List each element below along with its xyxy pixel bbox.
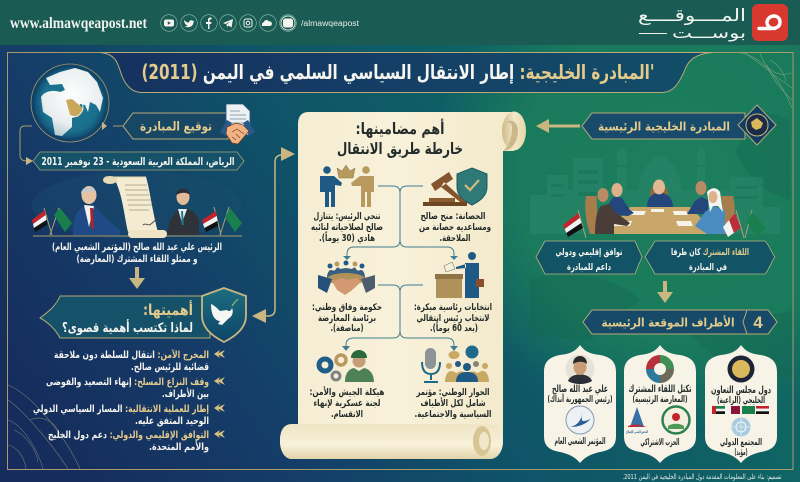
text: stepping down: هادي (30 يوماً). [319,231,375,244]
icon: unity government [318,260,375,295]
scroll heading: أهم مضامينها: [356,119,444,138]
signatories caption: و ممثلو اللقاء المشترك (المعارضة) [76,254,198,265]
map shapes in background [530,110,793,380]
text: national dialogue: شامل لكل الأطياف [420,397,486,409]
text: national dialogue: الحوار الوطني: مؤتمر [416,387,490,398]
corner ornament bottom left [8,385,80,469]
list item one: قضائية للرئيس صالح. [131,362,209,373]
card: Joint Meeting Parties: التجمع اليمني للإصلاح [626,429,648,435]
card: GCC states [705,345,777,463]
callout: regional and international consensus: داعم للمبادرة [567,262,611,273]
text: national dialogue: السياسية والاجتماعية. [414,409,492,420]
social media icons [161,15,296,31]
icon: dove shield [202,288,246,342]
saudi flag right [225,208,242,232]
scroll heading: خارطة طريق الانتقال [337,140,463,158]
flags by the table [563,210,766,238]
brand logo: المــــوقــــع [638,6,746,26]
text: military restructuring: الانقسام. [331,409,363,420]
list item three: الوحيد المتفق عليه. [135,416,209,427]
text: national unity government: برئاسة المعارضة [318,313,376,324]
icon: shield and gavel [423,168,487,206]
card: Ali Abdullah Saleh: (رئيس الجمهورية آنذاك) [548,393,612,405]
icon: GCC emblem [738,105,776,145]
signing illustration [32,171,242,239]
text: early elections: (بعد 60 يوماً). [430,321,478,334]
treaty scroll [103,176,167,238]
icon: gears and soldier [319,350,374,382]
list item one: المخرج الآمن: انتقال للسلطة دون ملاحقة [54,349,209,361]
callout: JMP was a party [645,241,775,274]
central figure [647,180,673,207]
title banner [100,52,712,92]
text: military restructuring: هيكلة الجيش والأمن: [310,386,384,398]
yemen flag left [32,210,47,232]
saudi flag left [54,208,72,232]
icon: microphone and people talking [422,346,489,382]
list item one [54,349,225,373]
card: Ali Abdullah Saleh: المؤتمر الشعبي العام [554,437,606,447]
text: military restructuring [310,386,384,420]
left signatory [73,186,120,235]
signatories caption: الرئيس علي عبد الله صالح (المؤتمر الشعبي العام) [52,242,222,253]
card: Ali Abdullah Saleh: علي عبد الله صالح [552,384,608,395]
banner: signing parties: الأطراف الموقعة الرئيسية [602,314,734,330]
text: national unity government [312,302,382,334]
list item three [33,404,225,427]
card: GCC states: (مؤيد) [734,448,748,458]
banner: main initiative [582,113,745,139]
text: national unity government: (مناصفة). [330,323,364,334]
arrow down to signing parties [657,281,673,303]
list item three: إطار للعملية الانتقالية: المسار السياسي الدولي [33,404,209,415]
arrow to roadmap scroll [536,119,580,133]
banner: signing parties [583,310,777,334]
website address: www.almawqeapost.net [10,15,148,32]
title banner: 'المبادرة الخليجية: إطار الانتقال السياسي السلمي في اليمن (2011) [142,60,654,85]
card: Joint Meeting Parties [624,345,696,463]
card: Joint Meeting Parties: الحزب الاشتراكي [640,438,680,448]
right side green glow [410,45,800,482]
card: GCC states: المجتمع الدولي [720,438,762,448]
banner: main initiative: المبادرة الخليجية الرئيسية [598,120,730,134]
brand logo [638,4,788,42]
date pill [33,152,244,170]
card: Ali Abdullah Saleh [544,345,616,463]
text: early elections: لانتخاب رئيس انتقالي [416,313,490,324]
text: national dialogue [414,387,492,420]
list item four [48,430,225,453]
banner: signing [123,113,228,139]
right signatory [167,189,199,235]
callout: JMP was a party: في المبادرة [689,262,727,273]
list item two: وقف النزاع المسلح: إنهاء التصعيد والفوضى [46,377,209,388]
scroll heading [337,119,463,158]
text: stepping down [311,211,383,244]
right figures [687,181,708,214]
list item two: بين الأطراف. [162,387,209,400]
connector arrowheads [342,256,458,351]
text: national unity government: حكومة وفاق وطني: [312,302,382,313]
text: immunity [419,211,491,244]
header bar [0,0,800,45]
icon: handover of crown [320,165,374,207]
text: immunity: ومساعديه حصانة من [419,222,491,233]
brand logo: بوســـت [672,24,746,42]
callout: JMP was a party: اللقاء المشترك كان طرفا [671,247,749,258]
importance list [33,349,225,453]
icon: ballot box and voter [435,252,484,298]
connector from globe to date [20,126,123,161]
left figures [608,183,634,216]
bracket arrows between importance and roadmap [252,147,295,323]
globe [31,64,109,142]
arrow down to importance [129,267,145,289]
meeting table illustration [585,180,735,234]
skyline illustration [530,147,780,234]
date pill: الرياض، المملكة العربية السعودية - 23 نوفمبر 2011 [42,156,234,168]
social handle: /almawqeapost [301,19,360,28]
importance banner [40,296,210,338]
text: stepping down: تنحي الرئيس: يتنازل [314,211,380,222]
text: early elections [414,302,492,334]
list item four: التوافق الإقليمي والدولي: دعم دول الخليج [48,430,209,441]
banner: signing parties: 4 [753,313,763,332]
card: Joint Meeting Parties: تكتل اللقاء المشترك [628,384,692,395]
parchment scroll panel [280,112,526,459]
callout: regional and international consensus: توافق إقليمي ودولي [556,247,622,258]
yemen flag right [202,211,218,232]
arrowhead at globe [102,122,107,130]
text: stepping down: صالح لصلاحياته لنائبه [311,222,383,233]
arrowhead to date pill [26,157,33,165]
callout: regional and international consensus [536,241,642,274]
importance banner: لماذا تكتسب أهمية قصوى؟ [62,319,193,336]
signatories caption [52,242,222,265]
importance banner: أهميتها: [143,300,193,319]
icon: handshake and document [220,104,255,144]
corner ornament top right [740,53,792,108]
text: immunity: الحصانة: منح صالح [420,211,486,222]
card: Joint Meeting Parties: (المعارضة الرئيسية) [632,395,688,405]
text: early elections: انتخابات رئاسية مبكرة: [414,302,492,313]
roadmap connectors [346,186,454,347]
text: immunity: الملاحقة. [440,233,470,244]
banner: signing: توقيع المبادرة [140,118,212,134]
card: GCC states: الخليجي (الراعية) [717,396,765,406]
text: military restructuring: لجنة عسكرية لإنهاء [314,398,380,409]
list item two [46,377,225,400]
list item four: والأمم المتحدة. [149,440,209,453]
